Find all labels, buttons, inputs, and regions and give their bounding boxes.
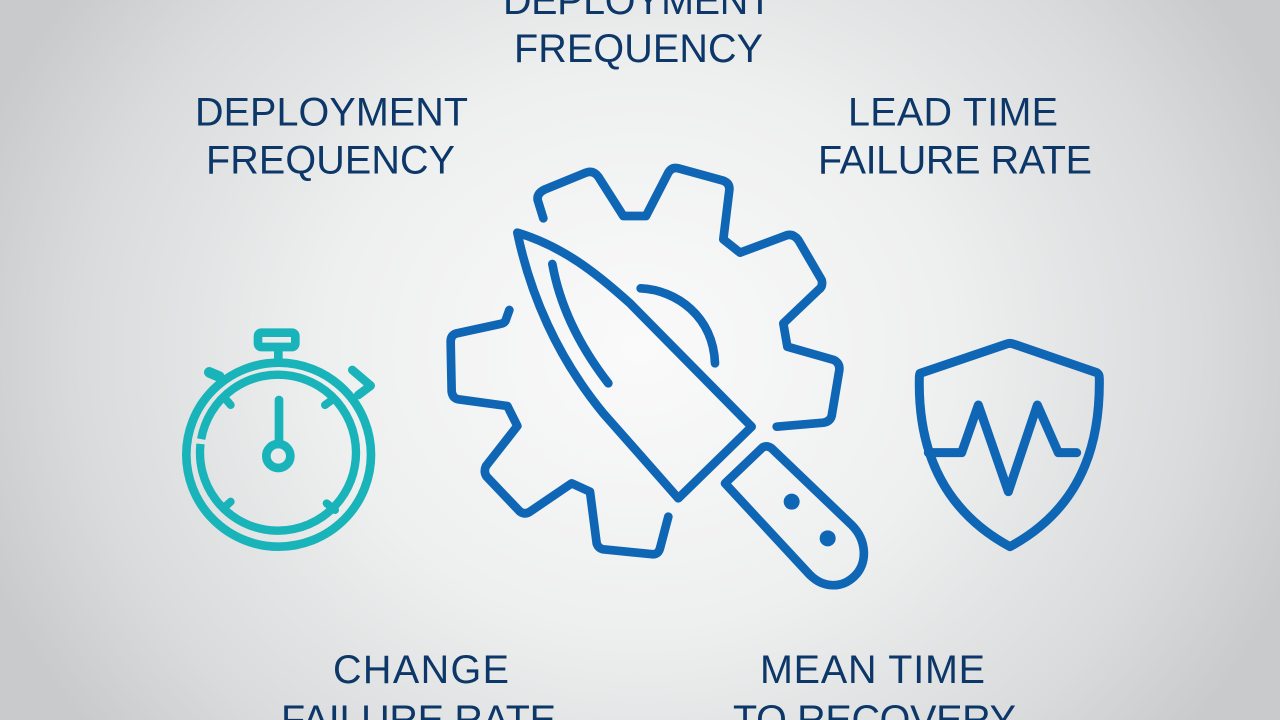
- label: deployment frequency: DEPLOYMENT: [195, 90, 468, 134]
- crown: [258, 333, 295, 347]
- gear outline: lower arc: [451, 310, 668, 554]
- label: change failure rate: CHANGE: [333, 648, 509, 692]
- heading: top deployment frequency: [503, 0, 772, 71]
- outer ring: [186, 363, 371, 547]
- gear outline: upper arc: [538, 168, 839, 427]
- hub: [266, 444, 290, 468]
- label: change failure rate: [281, 648, 556, 720]
- handle rivets: [784, 494, 836, 546]
- label: mean time to recovery: MEAN TIME: [760, 648, 985, 692]
- tick marks: [223, 398, 335, 510]
- label: deployment frequency: [195, 90, 468, 182]
- label: lead time failure rate: LEAD TIME: [848, 90, 1058, 134]
- pulse line: [928, 405, 1077, 492]
- label: deployment frequency: FREQUENCY: [206, 138, 455, 182]
- hand: [266, 400, 292, 443]
- heading: top deployment frequency: FREQUENCY: [514, 27, 763, 71]
- icon: gear with knife: [451, 168, 864, 585]
- label: lead time failure rate: FAILURE RATE: [818, 138, 1092, 182]
- shield outline: [919, 343, 1099, 547]
- inner ring: [188, 362, 368, 543]
- label: mean time to recovery: [733, 648, 1016, 720]
- icon: stopwatch: [186, 333, 371, 547]
- gear hub arc: [641, 288, 715, 363]
- knife blade: [517, 233, 752, 498]
- right button: [352, 370, 371, 395]
- crown stem: [265, 349, 291, 362]
- left button: [209, 372, 219, 377]
- knife handle: [725, 446, 864, 585]
- blade highlight: [552, 264, 608, 383]
- label: lead time failure rate: [818, 90, 1092, 182]
- icon: shield with pulse: [919, 343, 1099, 547]
